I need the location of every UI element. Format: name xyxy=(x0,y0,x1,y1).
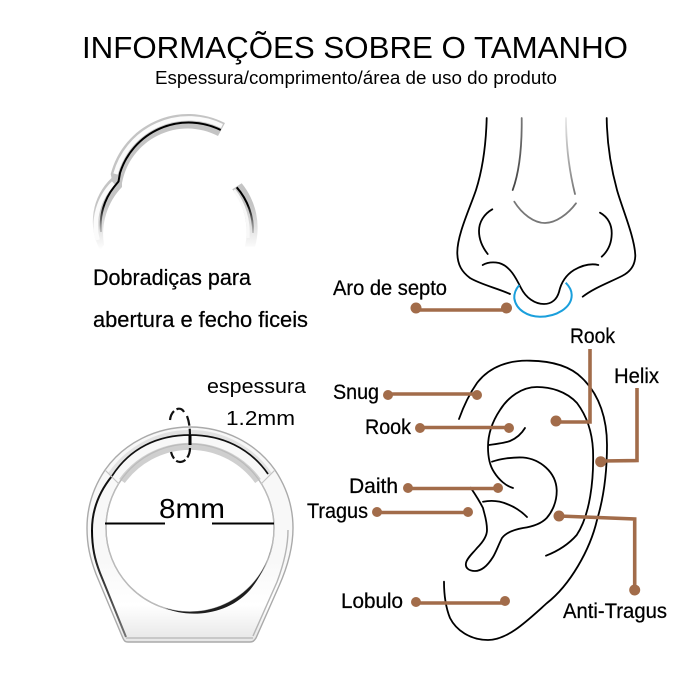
label: Rook right: Rook xyxy=(570,325,615,348)
nose diagram xyxy=(457,118,635,304)
label: thickness: espessura xyxy=(207,376,307,398)
text: hinges description: abertura e fecho ficeis xyxy=(93,307,308,332)
title: INFORMAÇÕES SOBRE O TAMANHO xyxy=(82,30,628,65)
label: Lobulo xyxy=(341,590,510,613)
label: Tragus: Tragus xyxy=(307,500,368,523)
label: Anti-Tragus xyxy=(554,510,667,623)
label: Lobulo: Lobulo xyxy=(341,590,403,613)
dimension: 8mm diameter: 8mm xyxy=(159,493,225,524)
icon: open hinged ring xyxy=(93,114,258,250)
label: Rook right xyxy=(550,325,615,426)
ring with flat base xyxy=(87,427,293,642)
label: Tragus xyxy=(307,500,473,523)
label: thickness xyxy=(207,376,307,430)
label: Snug: Snug xyxy=(333,381,379,404)
text: hinges description: Dobradiças para xyxy=(93,265,252,290)
label: Aro de septo: Aro de septo xyxy=(333,277,447,300)
thickness marker xyxy=(170,409,190,462)
label: Daith: Daith xyxy=(349,475,398,498)
label: Rook left: Rook xyxy=(365,416,411,439)
ear diagram xyxy=(444,361,607,640)
label: Daith xyxy=(349,475,503,498)
label: Anti-Tragus: Anti-Tragus xyxy=(563,600,667,623)
subtitle: Espessura/comprimento/área de uso do produto xyxy=(155,68,557,88)
text: hinges description xyxy=(93,265,308,332)
label: Helix xyxy=(595,365,659,467)
label: Helix: Helix xyxy=(614,365,659,388)
label: thickness: 1.2mm xyxy=(226,408,295,430)
label: Aro de septo xyxy=(333,277,512,314)
label: Rook left xyxy=(365,416,514,439)
icon: blue septum ring xyxy=(514,283,572,317)
label: Snug xyxy=(333,381,482,404)
